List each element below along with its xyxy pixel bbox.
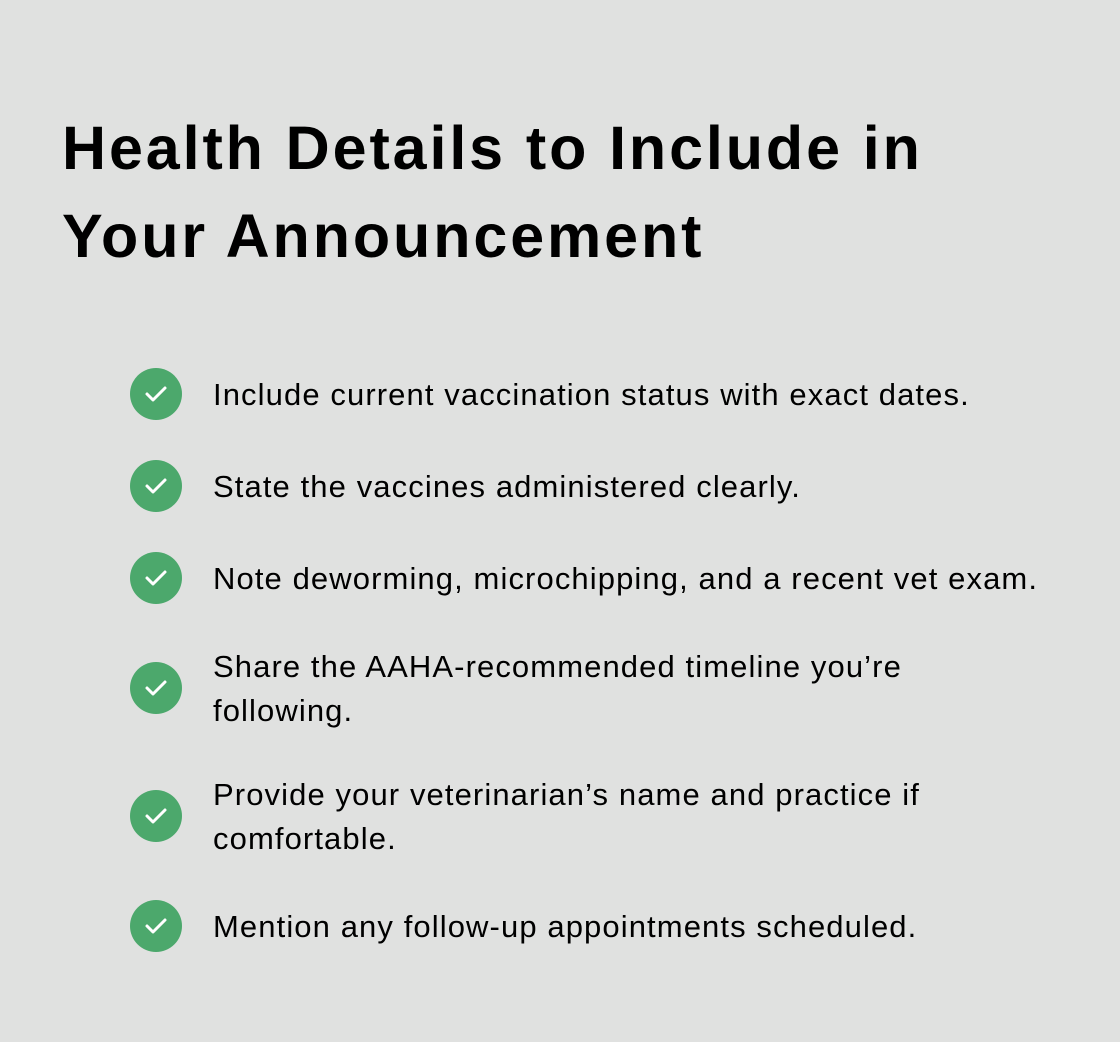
icon: check [130, 368, 182, 420]
title: Your Announcement [62, 202, 704, 270]
text: Provide your veterinarian’s name and practice if [213, 777, 920, 812]
item 2 [130, 460, 801, 512]
title [62, 114, 923, 270]
text: Share the AAHA-recommended timeline you’re [213, 649, 902, 684]
item 5 [130, 777, 920, 856]
title: Health Details to Include in [62, 114, 923, 182]
icon: check [130, 662, 182, 714]
icon: check [130, 460, 182, 512]
item 4 [130, 649, 902, 728]
text: comfortable. [213, 821, 397, 856]
icon: check [130, 552, 182, 604]
text [213, 649, 902, 728]
item 1 [130, 368, 970, 420]
text: State the vaccines administered clearly. [213, 469, 801, 504]
text: Note deworming, microchipping, and a recent vet exam. [213, 561, 1038, 596]
icon: check [130, 790, 182, 842]
text: Mention any follow-up appointments scheduled. [213, 909, 917, 944]
text: following. [213, 693, 353, 728]
text: Include current vaccination status with exact dates. [213, 377, 970, 412]
item 3 [130, 552, 1038, 604]
item 6 [130, 900, 917, 952]
icon: check [130, 900, 182, 952]
text [213, 777, 920, 856]
